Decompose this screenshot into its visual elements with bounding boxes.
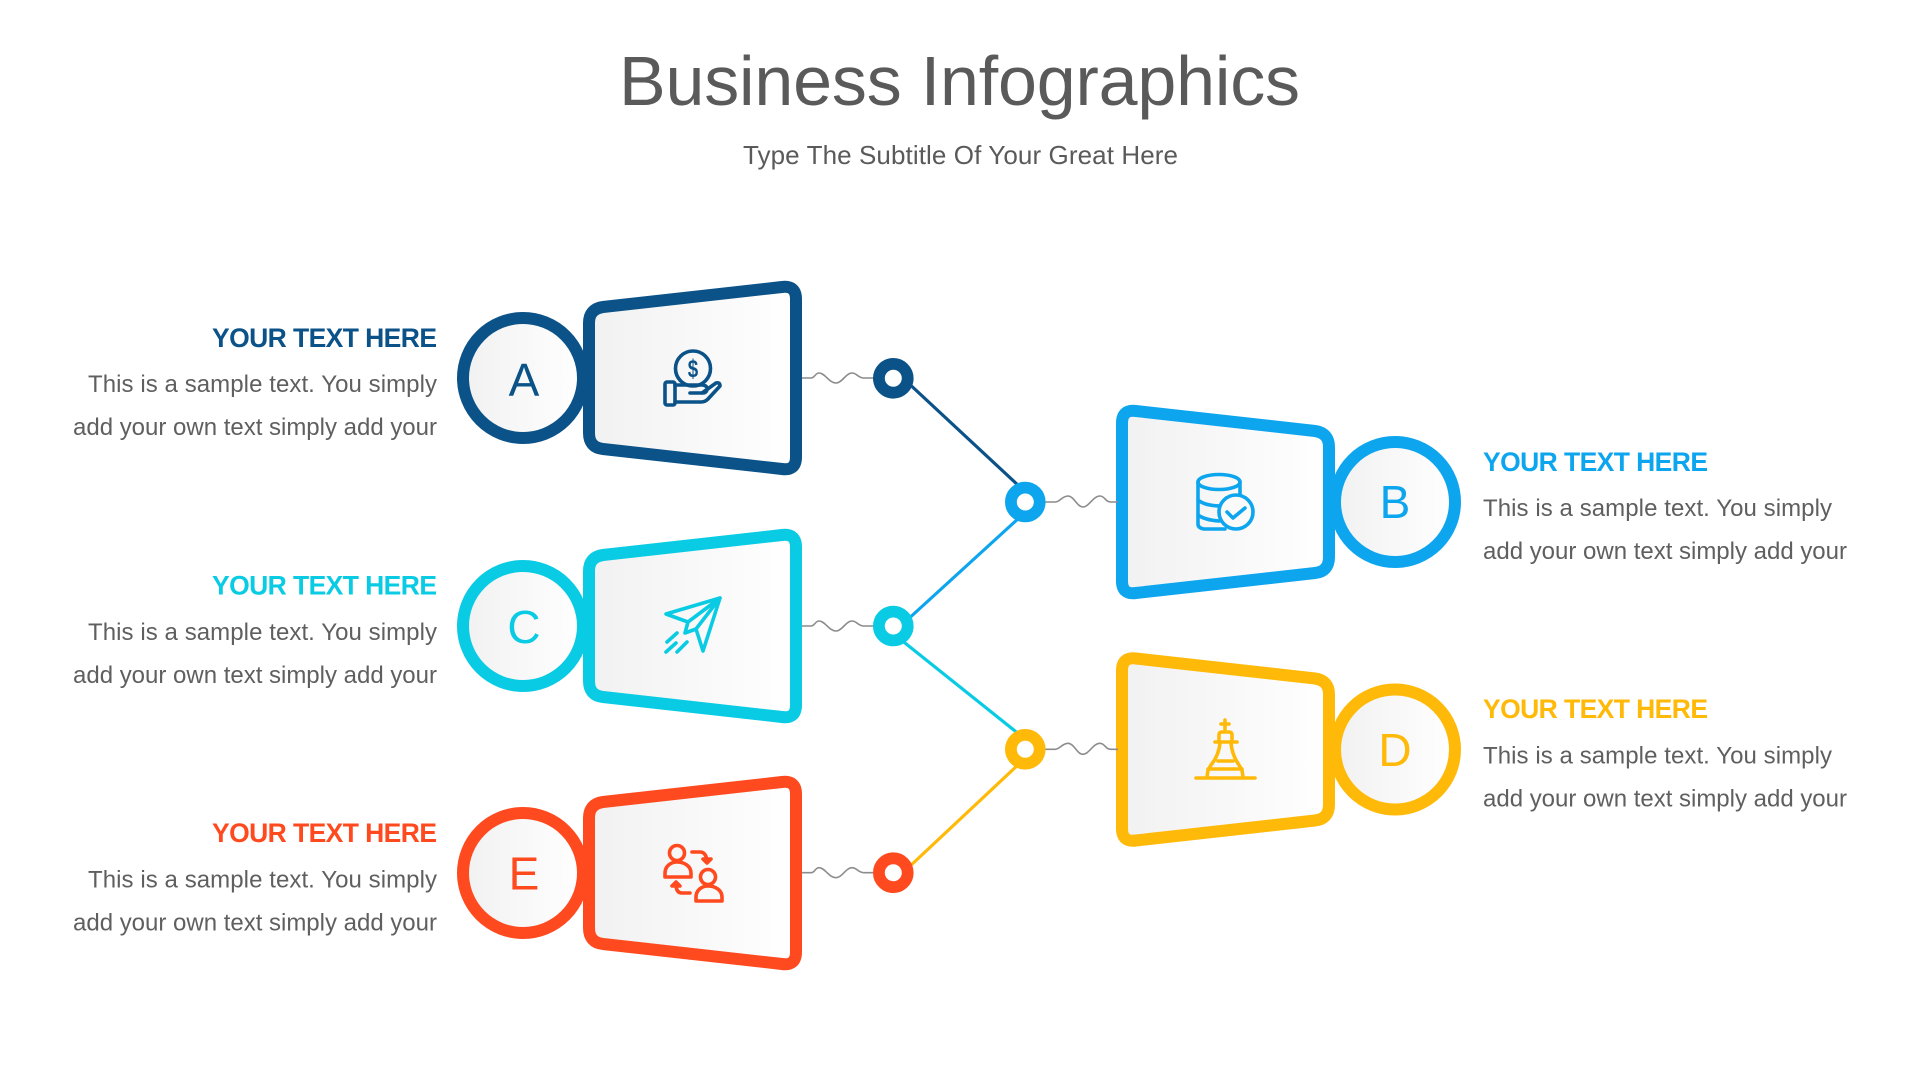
panel A: [73, 287, 908, 469]
wavy connector C: [802, 621, 875, 631]
node E: [879, 858, 908, 887]
card B: [1122, 411, 1329, 593]
body text E: [73, 866, 437, 936]
body text A: This is a sample text. You simply: [88, 371, 437, 398]
card A: [589, 287, 796, 469]
badge A: A: [509, 354, 540, 406]
body text C: This is a sample text. You simply: [88, 619, 437, 646]
icon: people exchange: [665, 846, 722, 901]
icon: coin in hand: $: [688, 354, 698, 383]
badge C: [463, 566, 583, 686]
body text B: This is a sample text. You simply: [1483, 495, 1832, 522]
badge C: C: [507, 601, 541, 653]
body text E: This is a sample text. You simply: [88, 866, 437, 894]
icon: database check: [1198, 474, 1253, 529]
body text D: This is a sample text. You simply: [1483, 742, 1832, 770]
body text D: add your own text simply add your: [1483, 786, 1847, 812]
wavy connector A: [802, 373, 875, 383]
node B: [1011, 488, 1040, 516]
body text E: add your own text simply add your: [73, 910, 437, 936]
panel B: [1011, 411, 1847, 593]
card C: [589, 535, 796, 717]
heading D: YOUR TEXT HERE: [1483, 694, 1708, 724]
badge D: [1335, 690, 1455, 810]
heading A: YOUR TEXT HERE: [212, 323, 437, 353]
card E: [589, 782, 796, 964]
body text D: [1483, 742, 1847, 812]
icon: paper plane: [666, 598, 720, 652]
node D: [1011, 735, 1040, 764]
badge B: B: [1380, 476, 1410, 528]
body text C: add your own text simply add your: [73, 662, 437, 689]
wavy connector D: [1045, 743, 1118, 754]
wavy connector E: [802, 868, 875, 878]
body text B: [1483, 495, 1847, 565]
connector lines: [900, 380, 1020, 868]
card D: [1122, 658, 1329, 841]
panel C: [73, 535, 908, 717]
icon: chess king: [1196, 720, 1255, 778]
heading E: YOUR TEXT HERE: [212, 818, 437, 848]
subtitle: Type The Subtitle Of Your Great Here: [743, 140, 1178, 170]
body text B: add your own text simply add your: [1483, 538, 1847, 565]
body text A: add your own text simply add your: [73, 414, 437, 441]
heading B: YOUR TEXT HERE: [1483, 447, 1708, 477]
body text C: [73, 619, 437, 689]
badge A: [463, 318, 583, 438]
badge E: [463, 813, 583, 933]
icon: coin in hand: [665, 351, 720, 405]
wavy connector B: [1045, 496, 1118, 507]
panel D: [1011, 658, 1847, 841]
body text A: [73, 371, 437, 441]
node C: [879, 612, 908, 640]
badge B: [1335, 442, 1455, 562]
panel E: [73, 782, 908, 964]
badge D: D: [1378, 724, 1412, 776]
heading C: YOUR TEXT HERE: [212, 570, 437, 600]
title: Business Infographics: [619, 42, 1300, 120]
node A: [879, 364, 908, 393]
badge E: E: [509, 848, 539, 900]
